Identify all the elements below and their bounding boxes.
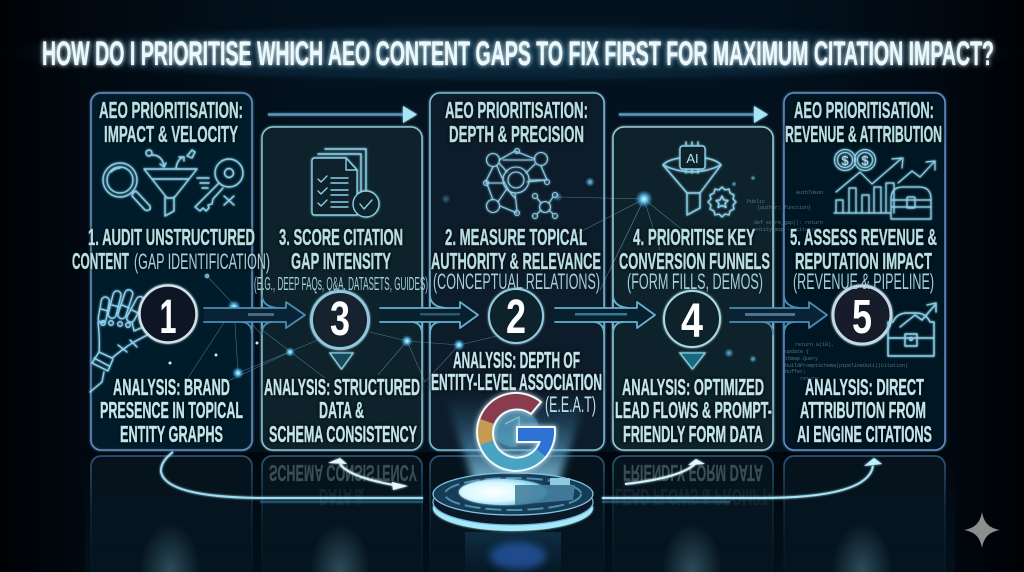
reflected text: LEAD FLOWS & PROMPT- bbox=[615, 484, 772, 510]
network nodes bbox=[168, 175, 757, 379]
icon: document checklist bbox=[312, 149, 379, 217]
number badge 4: 4 bbox=[681, 295, 703, 348]
code snippets: return; bbox=[800, 376, 821, 382]
analysis text: step 3: ANALYSIS: STRUCTURED bbox=[264, 374, 420, 400]
header text: step 1: AEO PRIORITISATION: bbox=[99, 97, 243, 123]
code snippets: tbmap.Query bbox=[785, 356, 818, 362]
icon: entity network bbox=[484, 148, 558, 218]
panel: step 1 bbox=[91, 93, 252, 450]
triangle marker 4 bbox=[680, 353, 705, 369]
panel: step 3 bbox=[262, 127, 422, 450]
arrow: 2 to 4 bbox=[555, 296, 655, 334]
icon: magnifier, funnel and key bbox=[103, 150, 243, 216]
number badge 4 bbox=[664, 291, 720, 348]
analysis text: step 3 bbox=[264, 374, 420, 447]
number badge 3: 3 bbox=[330, 293, 350, 346]
analysis text: step 5: ANALYSIS: DIRECT bbox=[805, 374, 924, 400]
code snippets: AuthToken bbox=[796, 190, 823, 196]
header text: step 2 bbox=[445, 97, 588, 147]
Google G logo bbox=[477, 393, 555, 471]
analysis text: step 4 bbox=[615, 374, 772, 447]
floor light spots bbox=[140, 522, 892, 572]
step text: 2: AUTHORITY & RELEVANCE bbox=[431, 248, 601, 274]
step text: 5 bbox=[790, 224, 937, 274]
header text: step 5 bbox=[785, 97, 942, 147]
step text: 4: 4. PRIORITISE KEY bbox=[633, 224, 755, 250]
icon: revenue chart and chest: $ bbox=[861, 153, 869, 168]
triangle marker 3 bbox=[330, 353, 353, 369]
icon: robot hand bbox=[90, 289, 153, 392]
analysis text: step 1 bbox=[100, 374, 243, 447]
number badge 2 bbox=[489, 289, 543, 344]
analysis text: step 2: ANALYSIS: DEPTH OF bbox=[453, 347, 580, 373]
code snippets: update { bbox=[785, 349, 809, 355]
subtitle: step 2: (CONCEPTUAL RELATIONS) bbox=[433, 269, 600, 294]
icon: sparkle watermark bbox=[964, 512, 1000, 548]
reflected text: FRIENDLY FORM DATA bbox=[623, 460, 763, 486]
arrow: 3 to 2 bbox=[380, 296, 478, 334]
code snippets: def score_gap(): return bbox=[754, 220, 823, 226]
reflected text: SCHEMA CONSISTENCY bbox=[269, 460, 417, 486]
floor bbox=[85, 452, 955, 572]
light beam bbox=[446, 398, 586, 490]
text: (E.G., DEEP FAQs, Q&A, DATASETS, GUIDES) bbox=[254, 274, 428, 294]
step text: 3: GAP INTENSITY bbox=[291, 248, 391, 274]
analysis text: step 1: ANALYSIS: BRAND bbox=[113, 374, 230, 400]
arrow: 4 to 5 bbox=[730, 296, 827, 334]
analysis text: step 4: ANALYSIS: OPTIMIZED bbox=[622, 374, 764, 400]
header text: step 2: DEPTH & PRECISION bbox=[449, 121, 584, 147]
analysis text: step 5: ATTRIBUTION FROM bbox=[800, 397, 926, 423]
code snippets: buildPromptSchema(pipelineOut1)(Citation) bbox=[785, 363, 908, 369]
number badge 5 bbox=[833, 286, 891, 344]
code snippets: buffer; bbox=[785, 369, 806, 375]
panel: step 5 bbox=[784, 93, 945, 450]
step text: 3: 3. SCORE CITATION bbox=[279, 224, 403, 250]
analysis text: step 4: LEAD FLOWS & PROMPT- bbox=[615, 397, 772, 423]
step text: 1: 1. AUDIT UNSTRUCTURED bbox=[88, 224, 255, 250]
reflected text: DATA & bbox=[319, 484, 364, 510]
analysis text: step 1: PRESENCE IN TOPICAL bbox=[100, 397, 243, 423]
arrow: top 2 to 5 bbox=[619, 106, 768, 123]
header text: step 1 bbox=[99, 97, 243, 147]
data stream marks bbox=[248, 313, 795, 316]
analysis text: step 2 bbox=[431, 347, 602, 395]
panel: step 2 bbox=[430, 93, 604, 450]
step text: 1: (GAP IDENTIFICATION) bbox=[134, 249, 270, 274]
icon: AI funnel and gear bbox=[663, 142, 736, 217]
curved arrow: small double arrow bbox=[328, 458, 408, 490]
code snippets: {author: function} bbox=[757, 205, 811, 211]
floor reflections bbox=[91, 456, 945, 572]
step text: 4 bbox=[619, 224, 770, 274]
header text: step 2: AEO PRIORITISATION: bbox=[445, 97, 588, 123]
analysis text: step 4: FRIENDLY FORM DATA bbox=[623, 421, 763, 447]
curved arrow: right feedback line bbox=[602, 458, 882, 502]
analysis text: step 3: DATA & bbox=[319, 397, 364, 423]
code snippets: Public bbox=[747, 199, 765, 205]
code snippets: entity_map -- citation bbox=[754, 227, 820, 233]
step text: 1: CONTENT bbox=[72, 248, 129, 274]
analysis text: step 3: SCHEMA CONSISTENCY bbox=[269, 421, 417, 447]
label: E.E.A.T: (E.E.A.T) bbox=[545, 392, 596, 417]
step text: 1 bbox=[72, 224, 270, 274]
curved arrow: small right arrow bbox=[625, 459, 705, 484]
step text: 2 bbox=[431, 224, 601, 274]
number badge 1 bbox=[140, 286, 196, 344]
step text: 3 bbox=[279, 224, 403, 274]
header text: step 1: IMPACT & VELOCITY bbox=[104, 121, 238, 147]
step text: 4: CONVERSION FUNNELS bbox=[619, 248, 770, 274]
analysis text: step 1: ENTITY GRAPHS bbox=[120, 421, 223, 447]
code snippets: return a(10), bbox=[795, 342, 834, 348]
title glow band bbox=[0, 22, 1024, 84]
icon: revenue chart and chest: $ bbox=[841, 153, 849, 168]
arrow: 1 to 3 bbox=[204, 296, 305, 334]
curved arrow: left feedback line bbox=[161, 452, 423, 502]
icon: revenue chart and chest bbox=[834, 150, 935, 219]
arrow: top 1 to 2 bbox=[268, 106, 417, 123]
number badge 1: 1 bbox=[160, 291, 176, 344]
code snippets bbox=[747, 190, 908, 382]
icon: AI funnel and gear: AI bbox=[686, 151, 699, 166]
step text: 2: 2. MEASURE TOPICAL bbox=[445, 224, 587, 250]
icon: treasure chest with arrow bbox=[888, 303, 936, 356]
subtitle: step 4: (FORM FILLS, DEMOS) bbox=[627, 269, 763, 294]
number badge 2: 2 bbox=[506, 291, 526, 344]
analysis text: step 2: ENTITY-LEVEL ASSOCIATION bbox=[431, 369, 602, 395]
panel: step 4 bbox=[613, 127, 773, 450]
network lines and nodes bbox=[188, 197, 685, 384]
hologram pedestal bbox=[433, 473, 593, 572]
number badge 5: 5 bbox=[852, 291, 872, 344]
analysis text: step 5 bbox=[797, 374, 932, 447]
reflected text bbox=[269, 460, 772, 510]
number badge 3 bbox=[312, 292, 368, 348]
